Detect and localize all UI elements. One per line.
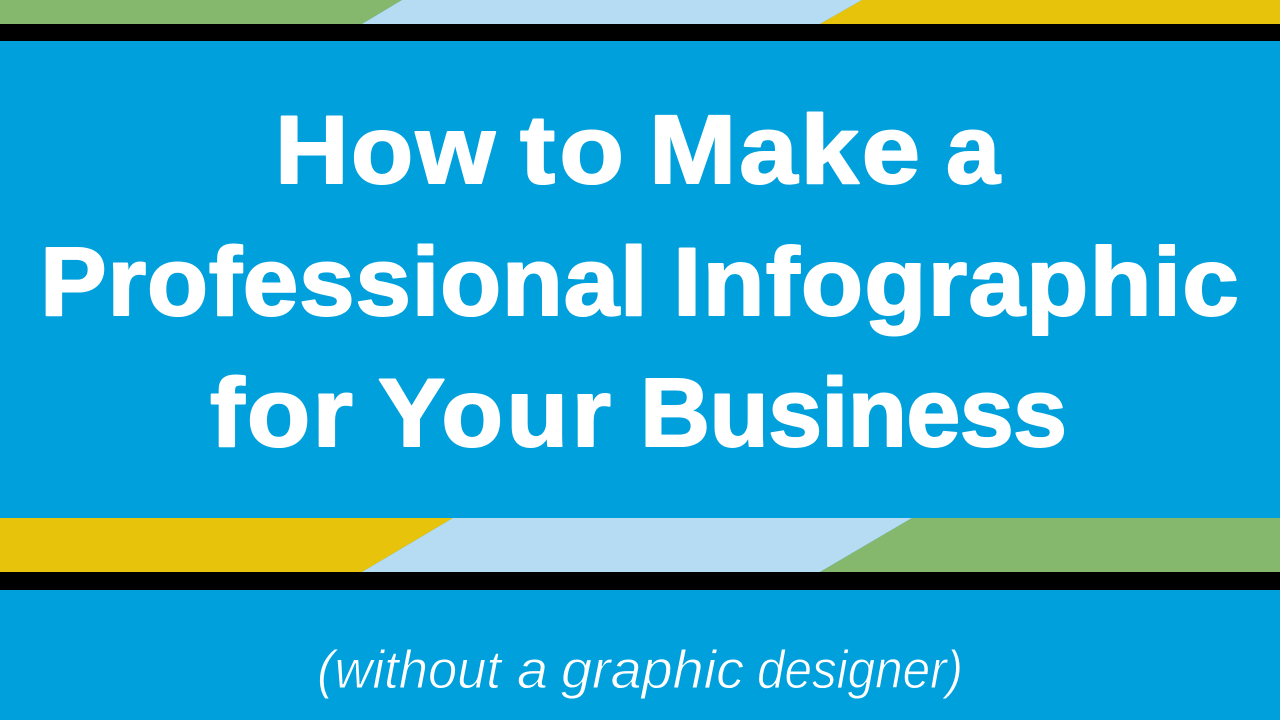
subtitle: a xyxy=(517,640,548,700)
bottom striped band xyxy=(0,518,1280,590)
title: for xyxy=(210,359,353,467)
top striped band xyxy=(0,0,1280,41)
title: Infographic xyxy=(673,228,1239,336)
title: a xyxy=(946,95,1001,204)
title xyxy=(40,95,1239,467)
subtitle: (without xyxy=(317,640,503,700)
title: Business xyxy=(640,358,1067,467)
subtitle xyxy=(317,640,963,700)
subtitle: designer) xyxy=(757,640,963,700)
title: Professional xyxy=(40,227,648,336)
title: How xyxy=(275,96,496,204)
subtitle: graphic xyxy=(561,640,744,700)
title: to xyxy=(520,96,624,204)
title: Your xyxy=(378,358,611,467)
title: Make xyxy=(649,97,920,204)
